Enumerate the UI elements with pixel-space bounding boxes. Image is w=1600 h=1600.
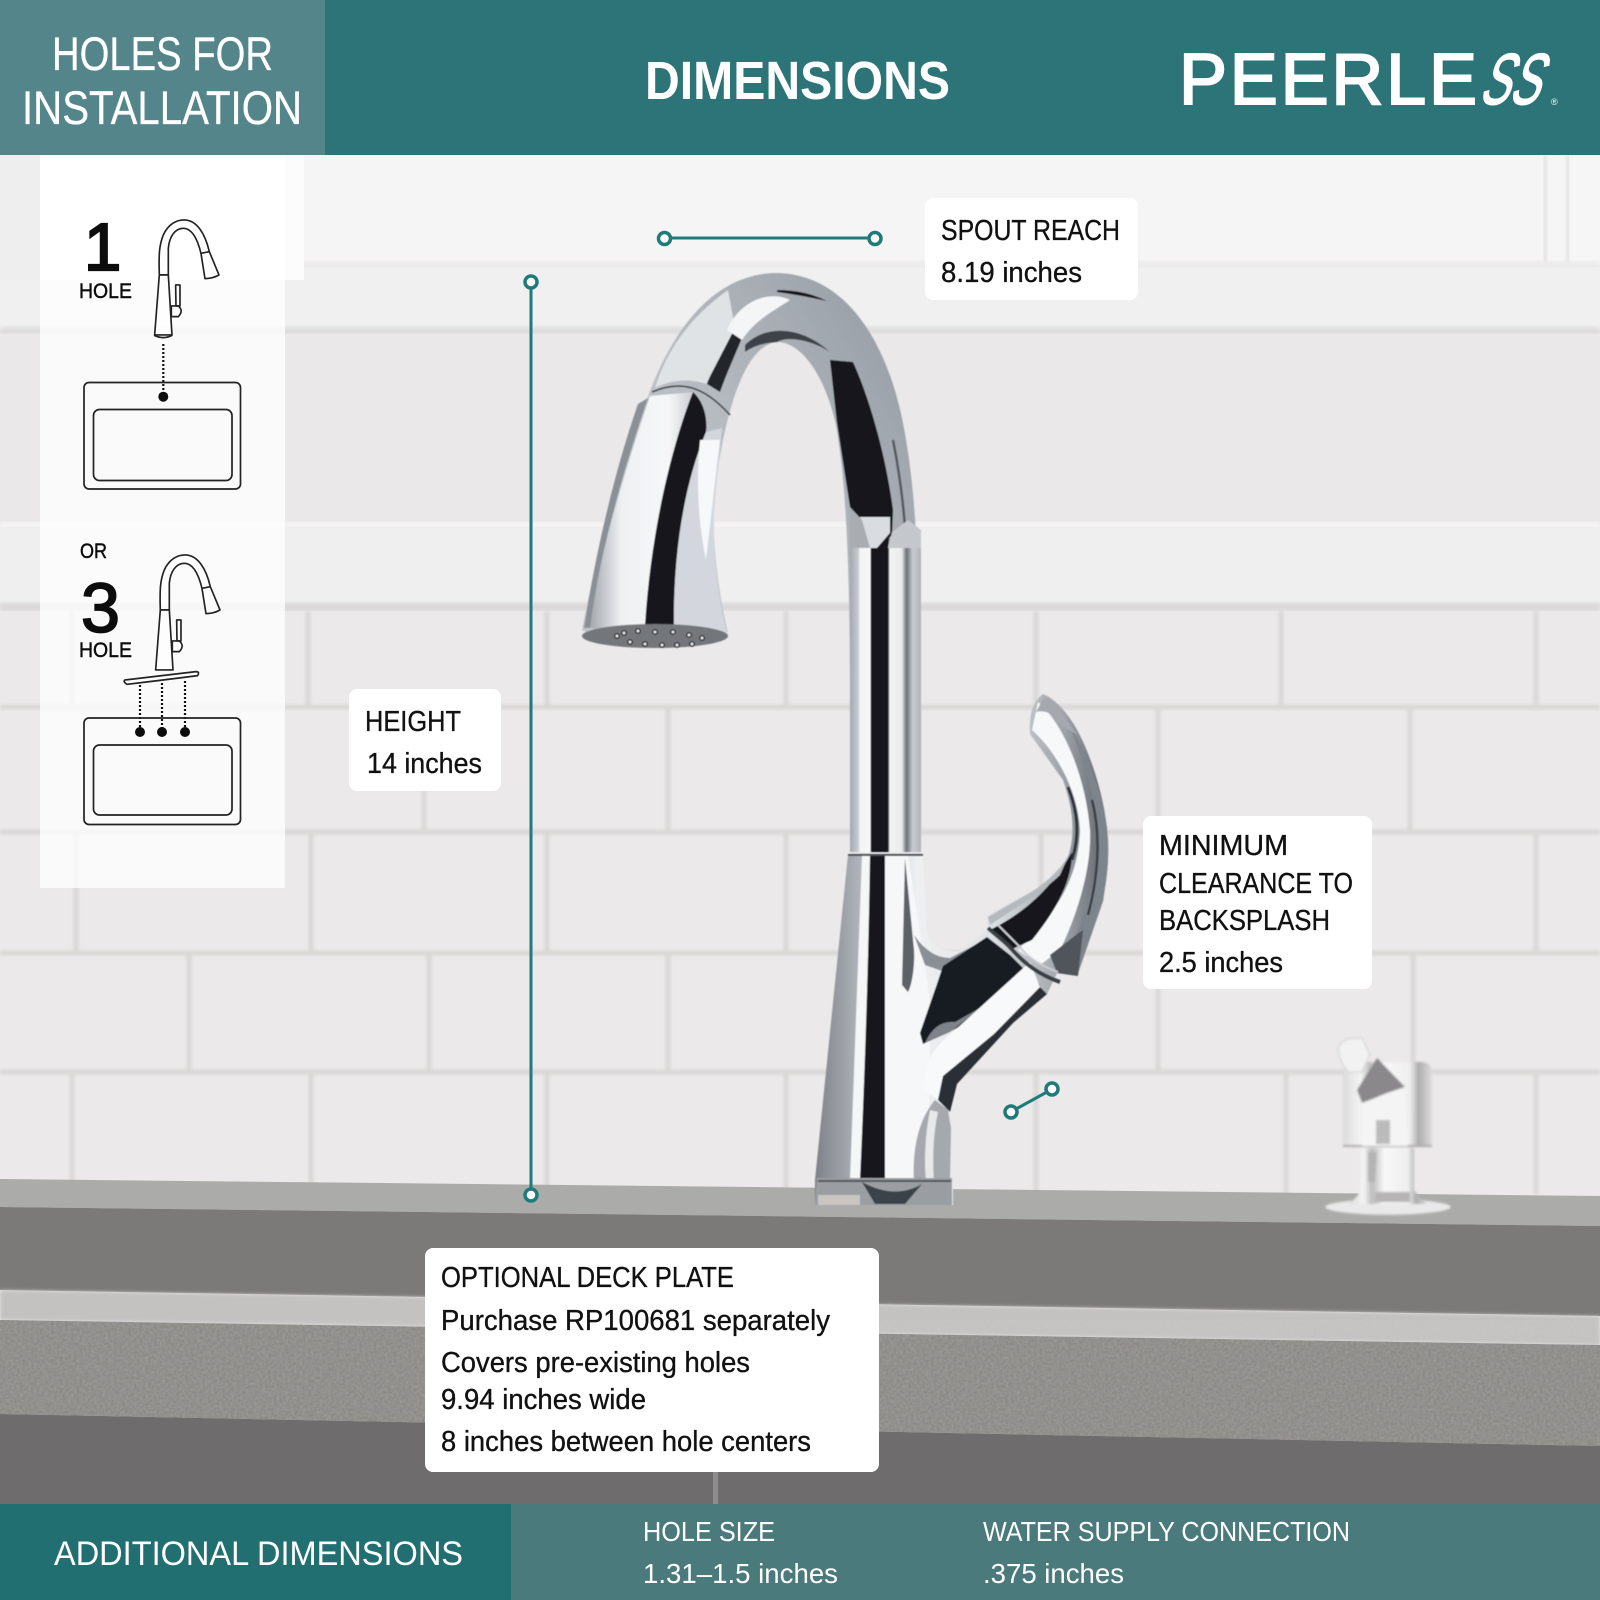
- footer stat: water supply connection: WATER SUPPLY CONNECTION: [983, 1516, 1350, 1547]
- main dark reflection: [830, 360, 893, 560]
- label: spout reach: [925, 198, 1138, 300]
- icon: dotted guide and sink with one hole: [84, 344, 240, 489]
- icon: dotted guides and sink with three holes: [84, 681, 240, 824]
- white band: [925, 962, 1040, 1100]
- title: dimensions: DIMENSIONS: [645, 51, 950, 111]
- dimension line: height: [525, 276, 537, 1201]
- spout arc and pull-down head: [582, 273, 921, 852]
- label: height: [349, 689, 501, 791]
- faucet body and handle: [815, 694, 1108, 1205]
- footer bar: additional dimensions: [0, 1504, 1600, 1600]
- logo: peerless: ®: [1551, 97, 1558, 107]
- logo: peerless: SS: [1472, 40, 1561, 120]
- footer stat: water supply connection: .375 inches: [983, 1558, 1124, 1589]
- collar rings: [988, 928, 1060, 982]
- label: height: HEIGHT: [365, 706, 461, 738]
- text: 1 hole: [79, 210, 132, 303]
- base: [815, 1178, 952, 1205]
- label: height: 14 inches: [367, 748, 482, 780]
- text: 1 hole: 1: [84, 210, 121, 285]
- label: minimum clearance: CLEARANCE TO: [1159, 868, 1353, 900]
- panel: installation holes: [40, 155, 285, 888]
- text: or 3 hole: [79, 539, 132, 662]
- footer stat: hole size: HOLE SIZE: [643, 1516, 775, 1547]
- soap dispenser: [1325, 1038, 1451, 1215]
- footer heading: ADDITIONAL DIMENSIONS: [54, 1535, 463, 1573]
- dark wedge: [920, 937, 1040, 1044]
- label: optional deck plate: [425, 1248, 879, 1472]
- logo: peerless: PEERLE: [1179, 40, 1477, 120]
- icon: faucet with deck plate: [124, 555, 220, 684]
- heading block: holes for installation: INSTALLATION: [22, 81, 302, 134]
- text: 1 hole: HOLE: [79, 279, 132, 303]
- header bar: [0, 0, 1600, 155]
- dark band below: [938, 987, 1047, 1112]
- faucet: [582, 273, 1108, 1205]
- heading block: holes for installation: [0, 0, 325, 155]
- label: optional deck plate: 8 inches between hole centers: [441, 1426, 811, 1458]
- label: minimum clearance: BACKSPLASH: [1159, 905, 1330, 937]
- inner arch shadow: [745, 331, 830, 352]
- footer stat: hole size: [643, 1516, 838, 1589]
- footer stat: water supply connection: [983, 1516, 1350, 1589]
- label: minimum clearance: MINIMUM: [1159, 830, 1288, 862]
- label: optional deck plate: 9.94 inches wide: [441, 1384, 646, 1416]
- text: or 3 hole: 3: [81, 569, 120, 647]
- label: spout reach: SPOUT REACH: [941, 215, 1120, 247]
- label: spout reach: 8.19 inches: [941, 257, 1082, 289]
- footer stat: hole size: 1.31–1.5 inches: [643, 1558, 838, 1589]
- text: or 3 hole: OR: [80, 539, 107, 563]
- dimension line: spout reach: [658, 232, 881, 244]
- handle: [1018, 702, 1090, 965]
- icon: faucet single hole: [154, 220, 219, 338]
- spray face: [582, 624, 728, 648]
- label: optional deck plate: Covers pre-existing holes: [441, 1347, 750, 1379]
- label: minimum clearance: [1143, 816, 1372, 989]
- heading block: holes for installation: HOLES FOR: [52, 27, 273, 80]
- label: optional deck plate: OPTIONAL DECK PLATE: [441, 1262, 734, 1294]
- label: minimum clearance: 2.5 inches: [1159, 947, 1283, 979]
- label: optional deck plate: Purchase RP100681 separately: [441, 1305, 830, 1337]
- dimension line: backsplash clearance: [1005, 1083, 1058, 1118]
- text: or 3 hole: HOLE: [79, 638, 132, 662]
